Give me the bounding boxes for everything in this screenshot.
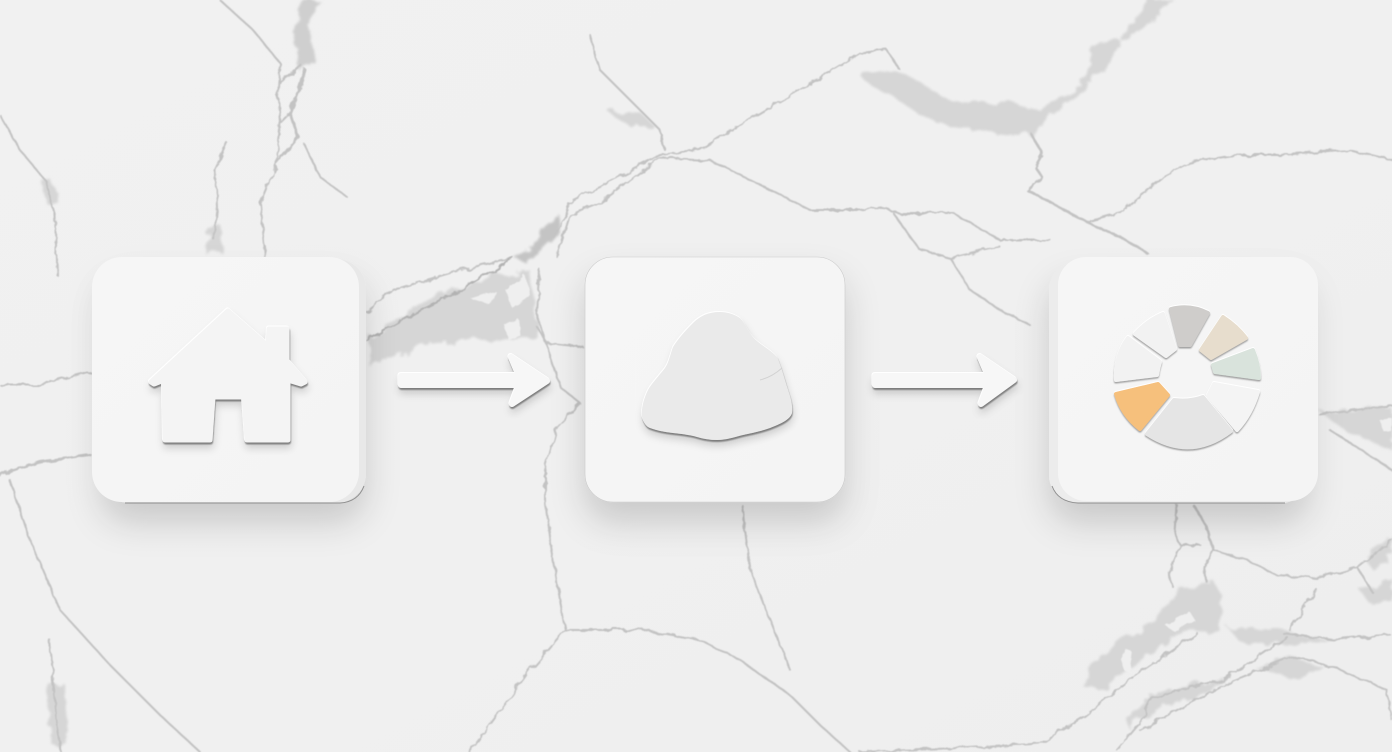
tile: home xyxy=(92,257,366,503)
icon: colour wheel xyxy=(1116,307,1259,447)
tile face xyxy=(1058,257,1318,501)
arrow: stone to colour palette xyxy=(875,357,1014,404)
segment: gray xyxy=(1171,307,1208,345)
tile face xyxy=(92,257,359,502)
segment: beige xyxy=(1201,317,1246,358)
segment: orange xyxy=(1116,384,1168,429)
tile bottom edge line xyxy=(125,486,364,503)
tile: colour palette xyxy=(1049,257,1318,503)
segment: large bottom gray xyxy=(1147,397,1231,447)
arrow: home to stone xyxy=(401,357,547,404)
segment: upper left white xyxy=(1135,314,1175,356)
white islands inside patches xyxy=(470,275,1392,672)
segment: left white xyxy=(1116,338,1160,380)
tile side edge xyxy=(100,259,366,503)
tile face xyxy=(585,257,845,502)
tile bottom edge line xyxy=(1052,486,1285,503)
tile: stone xyxy=(585,257,845,502)
segment: right white xyxy=(1208,384,1258,430)
segment: sage green xyxy=(1213,350,1259,378)
icon: stone crack xyxy=(760,368,782,380)
icon: house xyxy=(151,311,305,440)
tile side edge xyxy=(1049,262,1309,503)
icon: stone mound xyxy=(642,312,792,440)
